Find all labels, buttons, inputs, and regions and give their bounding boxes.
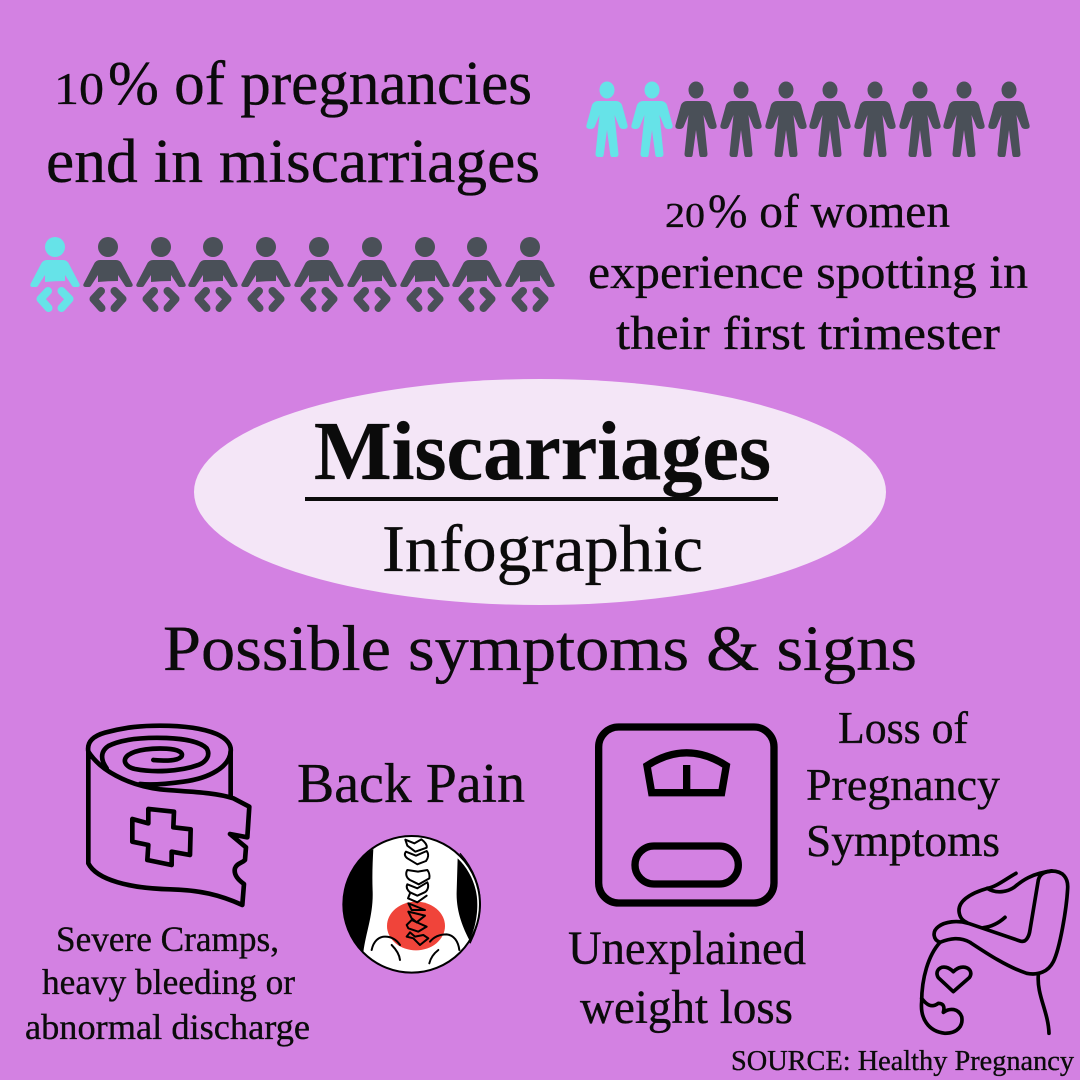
stat: 10% of pregnancies heading: % of pregnancies xyxy=(108,50,532,118)
icon: weighing scale xyxy=(599,727,774,903)
label: loss of pregnancy symptoms: Symptoms xyxy=(806,816,1000,866)
title: Miscarriages xyxy=(314,405,771,498)
label: back pain: Back Pain xyxy=(297,753,525,815)
label: loss of pregnancy symptoms: Loss of xyxy=(838,703,968,753)
label: unexplained weight loss: Unexplained xyxy=(568,922,806,975)
icon: pregnant belly with heart xyxy=(921,871,1068,1033)
label: unexplained weight loss xyxy=(568,922,806,1034)
source credit: SOURCE: Healthy Pregnancy xyxy=(731,1045,1074,1077)
subtitle: Infographic xyxy=(382,512,703,586)
stat: 10% of pregnancies heading: 10 xyxy=(54,64,104,114)
label: severe cramps: abnormal discharge xyxy=(25,1007,310,1047)
icon row: babies, 1 of 10 highlighted xyxy=(30,237,555,308)
label: severe cramps: heavy bleeding or xyxy=(42,962,295,1002)
stat: 20% of women text: experience spotting in xyxy=(588,246,1028,299)
stat: 10% of pregnancies heading xyxy=(46,50,540,196)
label: loss of pregnancy symptoms: Pregnancy xyxy=(806,760,1001,810)
label: unexplained weight loss: weight loss xyxy=(580,981,793,1034)
title ellipse xyxy=(194,379,886,605)
stat: 20% of women text xyxy=(588,185,1028,360)
icon: bandage roll xyxy=(88,726,249,905)
stat: 20% of women text: 20 xyxy=(665,196,705,235)
label: severe cramps xyxy=(25,919,310,1047)
stat: 10% of pregnancies heading: end in miscarriages xyxy=(46,128,540,196)
icon: lower back pain illustration xyxy=(343,836,480,973)
label: severe cramps: Severe Cramps, xyxy=(56,919,279,959)
label: loss of pregnancy symptoms xyxy=(806,703,1001,866)
icon row: women, 2 of 10 highlighted xyxy=(586,82,1030,157)
stat: 20% of women text: their first trimester xyxy=(616,307,1000,360)
stat: 20% of women text: % of women xyxy=(708,185,950,238)
section heading: Possible symptoms & signs xyxy=(163,613,917,685)
